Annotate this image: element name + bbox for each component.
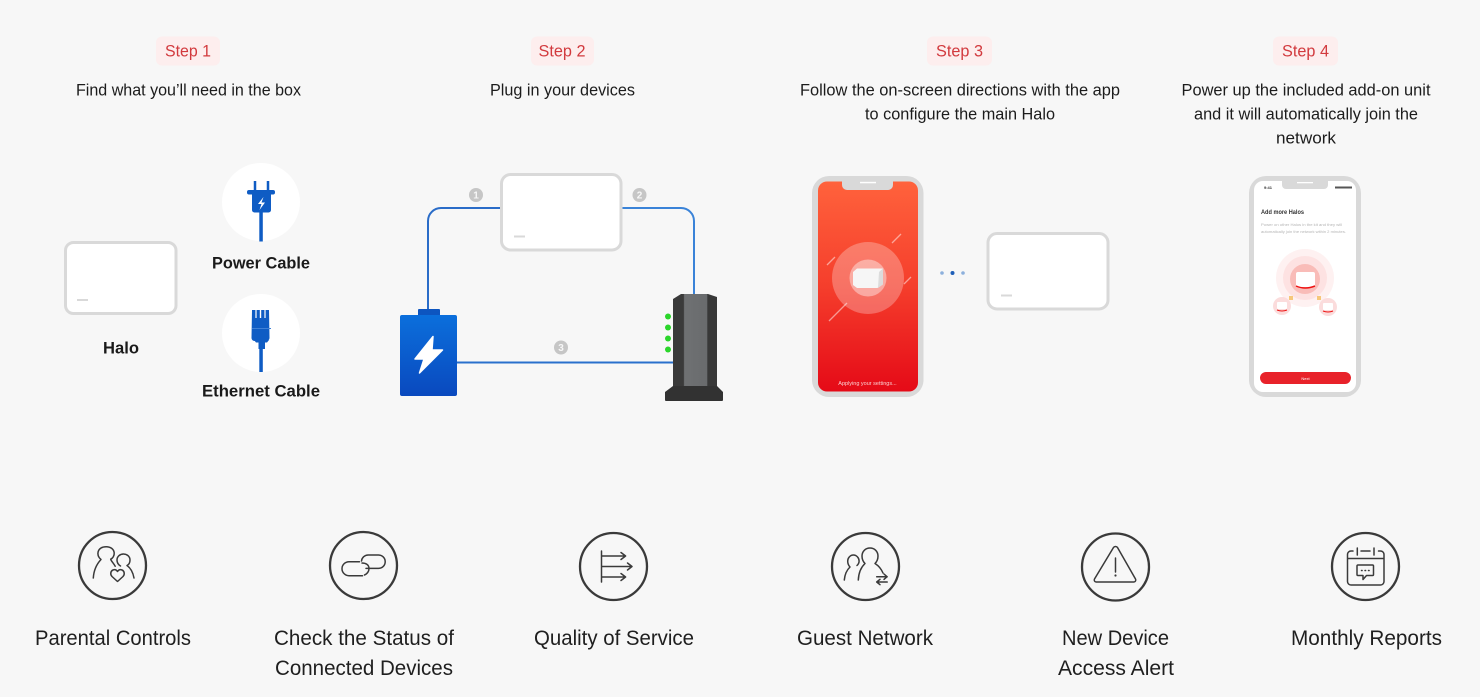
icon: guests	[832, 533, 899, 600]
label: Monthly Reports	[1291, 627, 1442, 650]
label: Quality of Service	[534, 627, 694, 650]
feature: monthly reports	[1291, 533, 1442, 650]
icon: chain link	[330, 532, 397, 599]
icon: power battery	[400, 309, 457, 396]
label	[274, 627, 454, 680]
step 4 description: and it will automatically join the	[1194, 104, 1418, 124]
device: Halo card	[502, 174, 621, 250]
icon: modem	[665, 294, 723, 401]
label	[1058, 627, 1174, 680]
number 3	[554, 340, 568, 354]
step 4 description: Power up the included add-on unit	[1182, 80, 1431, 100]
step 1 badge	[156, 36, 220, 66]
device: Halo card	[988, 234, 1108, 309]
number 1: 1	[473, 190, 479, 202]
label: Check the Status of	[274, 627, 454, 650]
step 3 badge: Step 3	[936, 42, 983, 60]
label: Connected Devices	[275, 657, 453, 680]
step 2 badge	[531, 36, 594, 66]
label: Power Cable: Power Cable	[212, 254, 310, 272]
feature: new device access alert	[1058, 534, 1174, 680]
step 1 badge: Step 1	[165, 42, 211, 60]
feature: guest network	[797, 533, 933, 650]
icon: arrows	[580, 533, 647, 600]
feature: quality of service	[534, 533, 694, 650]
panel: step 1	[66, 36, 320, 400]
connection dots	[940, 271, 965, 275]
icon: calendar with message	[1332, 533, 1399, 600]
phone: applying settings: Applying your settings...	[838, 381, 897, 387]
phone: add more halos: Power on other Halos in the kit and they will	[1261, 223, 1342, 227]
label: New Device	[1062, 627, 1169, 650]
cable 1	[428, 208, 501, 310]
icon: parent and child	[79, 532, 146, 599]
step 3 description: to configure the main Halo	[865, 104, 1055, 124]
device: Halo card	[66, 242, 176, 314]
phone: add more halos: 9:41	[1264, 185, 1273, 190]
number 2	[632, 188, 646, 202]
step 4 description: network	[1276, 128, 1336, 148]
icon: ethernet cable	[222, 294, 300, 372]
step 2 badge: Step 2	[538, 42, 586, 60]
number 1	[469, 188, 483, 202]
number 2: 2	[637, 190, 643, 202]
number 3: 3	[558, 343, 564, 354]
icon: warning triangle	[1082, 534, 1149, 600]
panel: step 4	[1182, 36, 1431, 397]
step 2 description: Plug in your devices	[490, 80, 635, 100]
step 4 badge: Step 4	[1282, 42, 1329, 60]
label: Access Alert	[1058, 657, 1174, 680]
step 3 badge	[927, 36, 992, 66]
step 3 description	[800, 80, 1120, 124]
step 4 description	[1182, 80, 1431, 148]
panel: step 2	[400, 36, 723, 401]
phone: applying settings	[812, 176, 924, 397]
icon: power cable	[222, 163, 300, 242]
phone: add more halos: Add more Halos	[1261, 210, 1305, 216]
phone: add more halos	[1249, 176, 1361, 397]
cable 2	[622, 208, 694, 296]
panel: step 3	[800, 36, 1120, 397]
label: Parental Controls	[35, 627, 191, 650]
step 3 description: Follow the on-screen directions with the app	[800, 80, 1120, 100]
phone: add more halos: Next	[1301, 376, 1310, 381]
phone: add more halos: automatically join the network within 2 minutes.	[1261, 230, 1346, 234]
label: Halo: Halo	[103, 340, 139, 358]
label: Guest Network	[797, 627, 933, 650]
feature: connected devices	[274, 532, 454, 680]
step 1 description: Find what you’ll need in the box	[76, 80, 301, 100]
label: Ethernet Cable: Ethernet Cable	[202, 382, 320, 400]
cable 3	[456, 362, 674, 364]
step 4 badge	[1273, 36, 1338, 66]
feature: parental controls	[35, 532, 191, 650]
